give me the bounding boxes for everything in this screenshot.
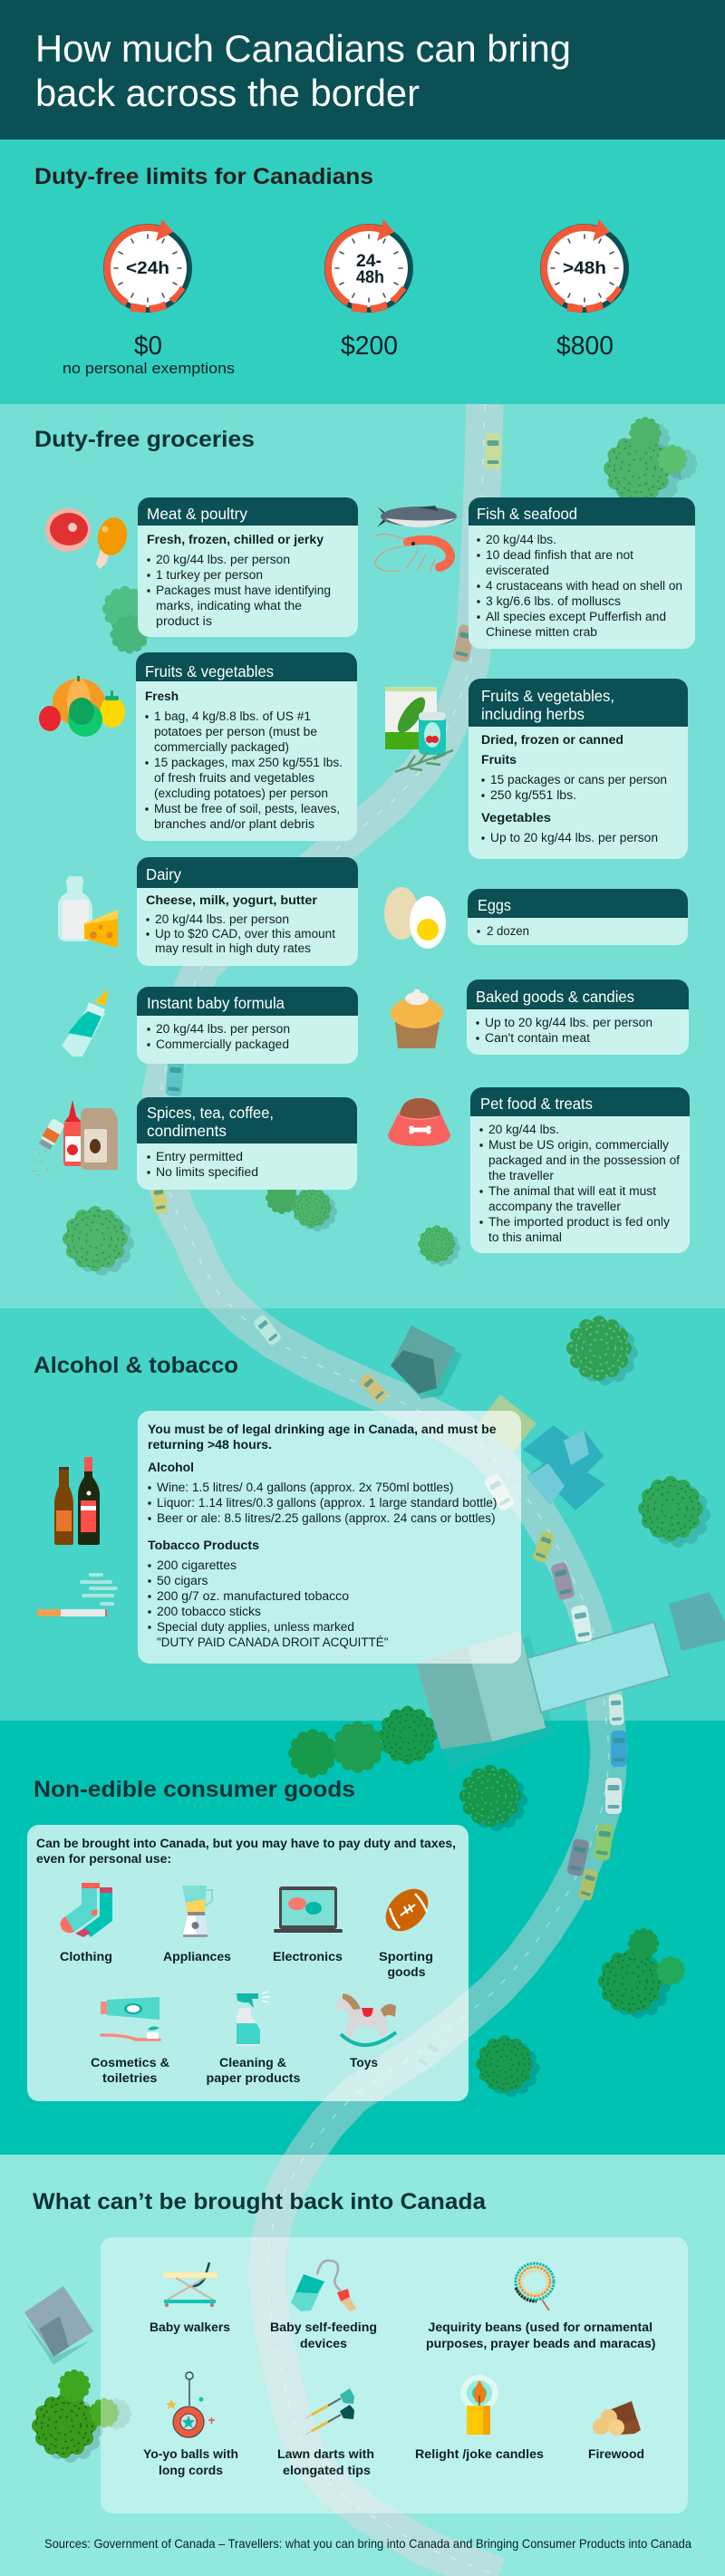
panel: fresh fruits and vegetables: of fresh fruits and vegetables <box>154 771 314 785</box>
panel: alcohol and tobacco: Alcohol <box>148 1461 194 1474</box>
icon: milk bottle and cheese <box>58 876 118 948</box>
item: cleaning and paper products: Cleaning & <box>219 2056 286 2069</box>
panel: eggs: Eggs <box>478 896 511 914</box>
panel: alcohol and tobacco: 200 tobacco sticks <box>157 1605 261 1618</box>
heading: duty-free groceries: Duty-free groceries <box>34 427 255 452</box>
panel: alcohol and tobacco: "DUTY PAID CANADA DROIT ACQUITTÉ" <box>157 1635 389 1649</box>
item: relight candles <box>415 2375 544 2461</box>
panel: fruits and vegetables including herbs: Up to 20 kg/44 lbs. per person <box>490 831 658 844</box>
item: toys <box>334 1992 396 2069</box>
panel: meat and poultry: Meat & poultry <box>147 505 247 523</box>
panel: what can't be brought back <box>101 2237 688 2513</box>
panel: pet food and treats: to this animal <box>488 1230 562 1244</box>
heading: duty-free limits: Duty-free limits for Canadians <box>34 164 373 189</box>
item: lawn darts: Lawn darts with <box>277 2447 374 2461</box>
item: cosmetics and toiletries: toiletries <box>102 2071 158 2085</box>
panel: alcohol and tobacco: Beer or ale: 8.5 litres/2.25 gallons (approx. 24 cans or bottles) <box>157 1511 495 1525</box>
panel: fresh fruits and vegetables: (excluding potatoes) per person <box>154 786 328 800</box>
panel: fish and seafood: 10 dead finfish that are not <box>486 548 633 562</box>
panel: alcohol and tobacco <box>138 1411 521 1664</box>
panel: pet food and treats: The imported product is fed only <box>488 1215 670 1229</box>
panel: meat and poultry: marks, indicating what the <box>156 599 302 613</box>
heading: what can't be brought back: What can’t be brought back into Canada <box>33 2189 487 2214</box>
clock: over 48 hours <box>543 219 626 361</box>
title: back across the border <box>35 72 420 114</box>
panel: fruits and vegetables including herbs <box>469 679 688 859</box>
panel: non-edible consumer goods: Can be brought into Canada, but you may have to pay duty and taxes, <box>36 1837 456 1850</box>
item: clothing <box>60 1883 112 1963</box>
item: lawn darts <box>277 2388 374 2477</box>
panel: meat and poultry: product is <box>156 614 212 628</box>
panel: baked goods and candies: Up to 20 kg/44 lbs. per person <box>485 1016 652 1029</box>
item: jequirity beans <box>426 2263 656 2350</box>
item: appliances: Appliances <box>163 1950 231 1963</box>
panel: fresh fruits and vegetables: potatoes per person (must be <box>154 725 317 738</box>
panel: fish and seafood <box>469 497 695 649</box>
panel: baked goods and candies: Baked goods & candies <box>476 988 634 1006</box>
panel: meat and poultry: 20 kg/44 lbs. per person <box>156 553 290 566</box>
panel: meat and poultry: Packages must have identifying <box>156 584 331 597</box>
panel: instant baby formula: 20 kg/44 lbs. per person <box>156 1022 290 1036</box>
clock: 24 to 48 hours <box>327 219 411 361</box>
item: jequirity beans: Jequirity beans (used for ornamental <box>428 2320 652 2334</box>
panel: dairy: Up to $20 CAD, over this amount <box>155 927 335 941</box>
panel: spices, tea, coffee, condiments: No limits specified <box>156 1165 258 1179</box>
panel: instant baby formula <box>137 987 358 1064</box>
panel: fruits and vegetables including herbs: including herbs <box>481 705 585 723</box>
panel: alcohol and tobacco: 200 cigarettes <box>157 1558 237 1572</box>
panel: pet food and treats: 20 kg/44 lbs. <box>488 1123 559 1136</box>
item: electronics: Electronics <box>273 1950 343 1963</box>
panel: pet food and treats: packaged and in the possession of <box>488 1153 680 1167</box>
panel: fresh fruits and vegetables: 15 packages, max 250 kg/551 lbs. <box>154 756 343 769</box>
panel: pet food and treats: The animal that will eat it must <box>488 1184 656 1198</box>
panel: fresh fruits and vegetables <box>136 652 357 841</box>
panel: baked goods and candies: Can't contain meat <box>485 1031 590 1045</box>
panel: fruits and vegetables including herbs: 15 packages or cans per person <box>490 773 667 786</box>
panel: fruits and vegetables including herbs: Fruits & vegetables, <box>481 687 614 705</box>
panel: dairy <box>137 857 358 966</box>
panel: alcohol and tobacco: 50 cigars <box>157 1574 208 1587</box>
panel: eggs: 2 dozen <box>487 924 529 938</box>
panel: spices, tea, coffee, condiments: condiments <box>147 1122 227 1140</box>
panel: instant baby formula: Commercially packaged <box>156 1037 289 1051</box>
panel: alcohol and tobacco: You must be of legal drinking age in Canada, and must be <box>148 1423 497 1436</box>
panel: fresh fruits and vegetables: Must be free of soil, pests, leaves, <box>154 802 340 815</box>
item: firewood: Firewood <box>588 2447 644 2461</box>
panel: meat and poultry <box>138 497 358 637</box>
item: baby self-feeding devices: devices <box>300 2337 347 2350</box>
panel: dairy: Cheese, milk, yogurt, butter <box>146 893 318 907</box>
trees <box>32 417 710 2463</box>
item: baby walkers: Baby walkers <box>150 2320 230 2334</box>
panel: fish and seafood: All species except Pufferfish and <box>486 610 666 623</box>
item: appliances <box>163 1886 231 1963</box>
panel: alcohol and tobacco: 200 g/7 oz. manufactured tobacco <box>157 1589 349 1603</box>
icon: eggs <box>384 887 446 949</box>
panel: pet food and treats: the traveller <box>488 1169 554 1182</box>
clock: over 48 hours: $800 <box>556 332 614 361</box>
panel: fruits and vegetables including herbs: Fruits <box>481 753 517 767</box>
panel: fruits and vegetables including herbs: Vegetables <box>481 811 551 825</box>
panel: fresh fruits and vegetables: 1 bag, 4 kg/8.8 lbs. of US #1 <box>154 709 311 723</box>
title <box>35 27 571 114</box>
icon: meat and drumstick <box>45 508 130 569</box>
panel: alcohol and tobacco: Wine: 1.5 litres/ 0.4 gallons (approx. 2x 750ml bottles) <box>157 1481 453 1494</box>
panel: fish and seafood: eviscerated <box>486 564 549 577</box>
clock: under 24 hours: $0 <box>134 332 162 361</box>
panel: meat and poultry: 1 turkey per person <box>156 568 263 582</box>
panel: non-edible consumer goods <box>27 1825 469 2101</box>
panel: fish and seafood: 4 crustaceans with head on shell on <box>486 579 682 593</box>
item: sporting goods: goods <box>388 1965 426 1979</box>
title: How much Canadians can bring <box>35 27 571 70</box>
panel: non-edible consumer goods: even for personal use: <box>36 1852 171 1866</box>
panel: alcohol and tobacco: Tobacco Products <box>148 1539 259 1552</box>
item: lawn darts: elongated tips <box>283 2464 371 2477</box>
panel: fish and seafood: 3 kg/6.6 lbs. of molluscs <box>486 594 621 608</box>
panel: instant baby formula: Instant baby formula <box>147 994 285 1012</box>
item: jequirity beans: purposes, prayer beads and maracas) <box>426 2337 656 2350</box>
panel: alcohol and tobacco: returning >48 hours. <box>148 1438 272 1452</box>
item: baby self-feeding devices <box>270 2261 377 2350</box>
item: baby self-feeding devices: Baby self-feeding <box>270 2320 377 2334</box>
item: toys: Toys <box>350 2056 378 2069</box>
panel: alcohol and tobacco: Special duty applies, unless marked <box>157 1620 354 1634</box>
panel: fish and seafood: Fish & seafood <box>477 505 577 523</box>
road <box>160 404 609 2576</box>
panel: fruits and vegetables including herbs: Dried, frozen or canned <box>481 733 624 747</box>
item: yo-yo balls: Yo-yo balls with <box>143 2447 238 2461</box>
item: clothing: Clothing <box>60 1950 112 1963</box>
icon: fish and shrimp <box>375 506 457 573</box>
panel: pet food and treats: Pet food & treats <box>480 1095 593 1113</box>
item: cleaning and paper products: paper products <box>207 2071 301 2085</box>
item: firewood <box>588 2401 644 2461</box>
panel: fresh fruits and vegetables: branches and/or plant debris <box>154 817 314 831</box>
panel: duty-free limits <box>34 164 626 377</box>
icon: cupcake <box>391 989 443 1048</box>
icon: cigarette and smoke <box>37 1575 116 1616</box>
item: cosmetics and toiletries <box>91 1997 169 2085</box>
panel: dairy: may result in high duty rates <box>155 941 311 955</box>
icon: baby bottle <box>62 990 108 1056</box>
icon: pet food bowl <box>388 1098 450 1146</box>
clock: over 48 hours: >48h <box>563 259 606 278</box>
item: yo-yo balls <box>143 2372 238 2477</box>
clock: under 24 hours: no personal exemptions <box>63 360 235 377</box>
icon: spices, ketchup, coffee <box>34 1100 118 1175</box>
icon: beer and wine bottles <box>54 1457 100 1545</box>
panel: pet food and treats: Must be US origin, commercially <box>488 1138 669 1152</box>
panel: spices, tea, coffee, condiments: Entry permitted <box>156 1150 243 1163</box>
heading: alcohol and tobacco: Alcohol & tobacco <box>34 1353 238 1378</box>
item: electronics <box>273 1886 343 1963</box>
heading: non-edible consumer goods: Non-edible consumer goods <box>34 1777 355 1802</box>
icon: fresh fruits and vegetables <box>39 676 125 737</box>
panel: dairy: 20 kg/44 lbs. per person <box>155 912 289 926</box>
item: cleaning and paper products <box>207 1992 301 2085</box>
clock: 24 to 48 hours: $200 <box>341 332 398 361</box>
clock: under 24 hours <box>63 219 235 377</box>
panel: fish and seafood: Chinese mitten crab <box>486 625 597 639</box>
panel: fresh fruits and vegetables: commercially packaged) <box>154 740 289 754</box>
item: relight candles: Relight /joke candles <box>415 2447 544 2461</box>
panel: spices, tea, coffee, condiments: Spices, tea, coffee, <box>147 1104 274 1122</box>
panel: baked goods and candies <box>467 979 689 1055</box>
item: baby walkers <box>150 2262 230 2334</box>
item: yo-yo balls: long cords <box>159 2464 223 2477</box>
panel: spices, tea, coffee, condiments <box>137 1097 357 1190</box>
houses and buildings <box>24 1326 725 2365</box>
panel: fish and seafood: 20 kg/44 lbs. <box>486 533 556 546</box>
clock: under 24 hours: <24h <box>126 259 169 278</box>
panel: eggs <box>468 889 688 945</box>
clock: 24 to 48 hours: 48h <box>356 268 384 287</box>
panel: dairy: Dairy <box>146 865 181 883</box>
clock: 24 to 48 hours: 24- <box>356 252 382 271</box>
item: cosmetics and toiletries: Cosmetics & <box>91 2056 169 2069</box>
panel: fresh fruits and vegetables: Fruits & vegetables <box>145 662 274 680</box>
icon: peas bag, can and herbs <box>385 687 453 772</box>
panel: fruits and vegetables including herbs: 250 kg/551 lbs. <box>490 788 576 802</box>
panel: meat and poultry: Fresh, frozen, chilled or jerky <box>147 533 324 546</box>
panel: pet food and treats: accompany the traveller <box>488 1200 622 1213</box>
item: sporting goods: Sporting <box>379 1950 433 1963</box>
item: sporting goods <box>377 1880 437 1979</box>
panel: pet food and treats <box>470 1087 690 1253</box>
cars on the road <box>151 433 627 2071</box>
panel: alcohol and tobacco: Liquor: 1.14 litres/0.3 gallons (approx. 1 large standard bottle) <box>157 1496 497 1510</box>
panel: fresh fruits and vegetables: Fresh <box>145 690 179 703</box>
